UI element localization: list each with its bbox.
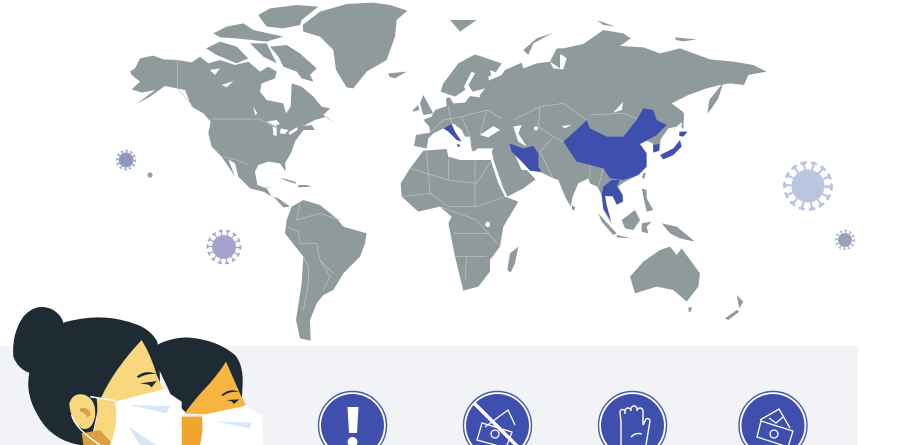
Africa (401, 149, 518, 291)
inland seas (464, 70, 623, 147)
Lake Victoria (485, 222, 490, 227)
Borneo (622, 210, 640, 230)
rear mask (200, 406, 263, 445)
rear hair (150, 337, 243, 413)
Canadian Arctic islands (206, 5, 318, 82)
front woman (13, 307, 182, 445)
highlighted: Italy (443, 124, 462, 147)
New Zealand (725, 295, 743, 320)
Sri Lanka (572, 205, 575, 211)
rear woman (150, 337, 263, 445)
Sakhalin (682, 112, 684, 128)
Iceland (388, 72, 407, 78)
borders: Americas (177, 60, 340, 310)
neck shadow (82, 430, 113, 445)
illustration: two masked women (13, 307, 263, 445)
icon: no cash (464, 392, 532, 445)
highlighted: Southeast Asia (602, 180, 623, 220)
Kamchatka (707, 83, 723, 113)
North America (130, 56, 335, 207)
Madagascar (507, 247, 518, 273)
world map (130, 3, 767, 341)
Taiwan (642, 173, 646, 179)
Greenland (303, 3, 407, 88)
eyebrow and eye (137, 372, 157, 387)
New Guinea (662, 223, 695, 242)
South America (285, 200, 367, 341)
highlighted: Japan (660, 132, 688, 159)
rear face (183, 362, 246, 417)
virus: South America side (208, 230, 240, 264)
virus: large right (784, 162, 832, 210)
rear eyebrow and eye (221, 390, 239, 404)
map: Americas and Greenland (130, 3, 407, 341)
UK and Ireland (413, 95, 433, 115)
bun (13, 307, 63, 375)
front mask (110, 389, 182, 445)
highlighted: China (563, 108, 667, 180)
highlighted: South Korea (653, 144, 659, 153)
Eurasia (414, 30, 767, 224)
Australia (630, 247, 700, 302)
highlighted: Iran (509, 143, 542, 172)
icon: exclamation (318, 392, 386, 445)
virus: far left (116, 150, 136, 170)
icon: cash (739, 392, 807, 445)
icon: raised hand (598, 392, 666, 445)
front hair (28, 317, 160, 445)
mask ear loop (72, 397, 115, 445)
borders: Eurasia and Africa (402, 103, 637, 280)
rear neck (182, 417, 203, 445)
Scandinavia (441, 54, 502, 97)
virus: small right (836, 230, 854, 250)
map: Eurasia, Africa, Oceania (401, 20, 767, 320)
Great Lakes (210, 68, 298, 136)
Philippines (642, 188, 653, 212)
ear (69, 394, 95, 429)
Svalbard (450, 20, 477, 32)
front face (100, 340, 163, 413)
Caribbean islands (280, 178, 312, 187)
Sumatra and Java (598, 213, 632, 238)
Tasmania (688, 307, 692, 312)
Sulawesi and Moluccas (642, 222, 652, 233)
virus: small dot (147, 172, 153, 178)
Arctic islands (523, 20, 697, 68)
panel: lower band (0, 346, 858, 445)
